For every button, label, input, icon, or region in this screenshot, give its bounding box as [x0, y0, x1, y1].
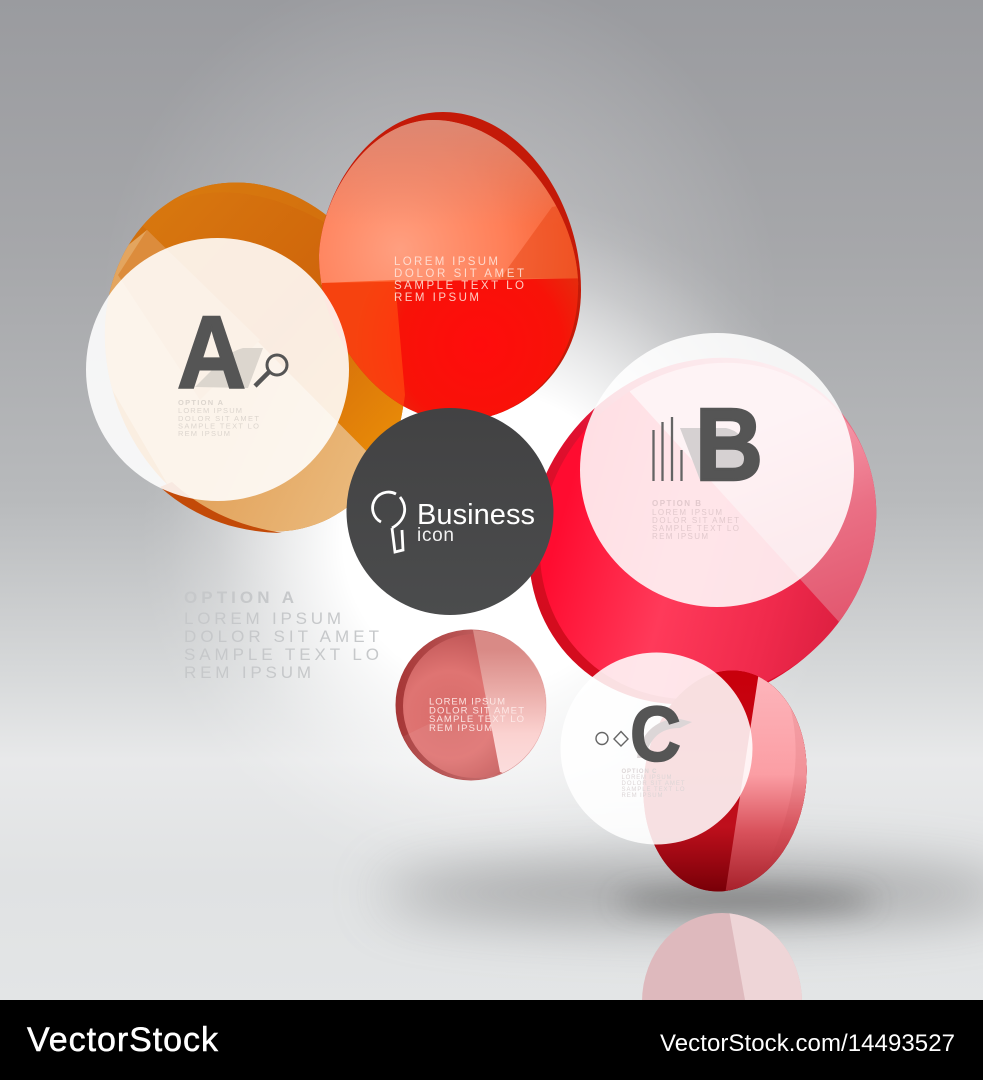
- text: red shape lorem ipsum: DOLOR SIT AMET: [394, 268, 524, 280]
- text: icon: icon: [417, 525, 454, 546]
- panel: red shape with text: [319, 112, 581, 416]
- text: option A large faded: DOLOR SIT AMET: [184, 627, 379, 646]
- text: option B small: REM IPSUM: [652, 532, 708, 541]
- text: option B small: DOLOR SIT AMET: [652, 516, 739, 525]
- text: option A large faded: LOREM IPSUM: [184, 609, 341, 628]
- text: small circle lorem ipsum: [429, 696, 524, 734]
- text: small circle lorem ipsum: DOLOR SIT AMET: [429, 706, 524, 716]
- heading: letter B: B: [695, 387, 763, 502]
- text: option C small: OPTION C: [622, 769, 657, 775]
- text: option C small: [622, 769, 685, 799]
- text: option B small: OPTION B: [652, 499, 701, 508]
- icon: letter B shadow: [680, 428, 747, 480]
- icon: letter A shadow: [195, 348, 263, 388]
- text: option A small: OPTION A: [178, 398, 224, 407]
- panel: dark circle: [346, 408, 554, 615]
- text: option B small: LOREM IPSUM: [652, 508, 722, 517]
- bottom crescent: [160, 482, 282, 533]
- text: option B small: [652, 499, 739, 541]
- text: option A large faded: OPTION A: [184, 588, 294, 607]
- text: option A small: LOREM IPSUM: [178, 406, 242, 415]
- text: option A large faded: SAMPLE TEXT LO: [184, 645, 379, 664]
- text: red shape lorem ipsum: REM IPSUM: [394, 292, 479, 304]
- panel: small red circle: [396, 630, 546, 780]
- text: option C small: DOLOR SIT AMET: [622, 781, 685, 787]
- text: option A small: DOLOR SIT AMET: [178, 414, 259, 423]
- icon: magnifier: [255, 355, 287, 386]
- footer bar: [0, 1000, 983, 1080]
- panel: white circle A: [86, 238, 349, 501]
- icon: circle and diamond: [596, 732, 628, 746]
- text: option A small: SAMPLE TEXT LO: [178, 422, 259, 430]
- panel: pink shape: [530, 358, 876, 704]
- heading: letter A: A: [177, 294, 246, 410]
- reflection of red shape: [642, 913, 802, 1000]
- panel: orange shape: [105, 182, 404, 533]
- text: option A small: [178, 398, 259, 438]
- text: red shape lorem ipsum: [394, 256, 524, 304]
- text: option A large faded: [184, 588, 379, 682]
- panel: red egg shape: [643, 670, 807, 892]
- text: option C small: REM IPSUM: [622, 793, 662, 799]
- icon: light bulb: [373, 492, 405, 552]
- text: VectorStock logo: VectorStock: [27, 1021, 219, 1059]
- icon: letter C shadow: [637, 719, 692, 758]
- text: option C small: SAMPLE TEXT LO: [622, 787, 685, 793]
- panel: white circle C: [560, 652, 752, 844]
- text: small circle lorem ipsum: LOREM IPSUM: [429, 696, 505, 708]
- text: red shape lorem ipsum: SAMPLE TEXT LO: [394, 280, 524, 292]
- floor shadow: [380, 863, 983, 923]
- text: option A small: REM IPSUM: [178, 429, 230, 438]
- text: small circle lorem ipsum: SAMPLE TEXT LO: [429, 714, 524, 725]
- text: option A large faded: REM IPSUM: [184, 663, 311, 682]
- dark outer shape: [319, 112, 581, 421]
- text: image URL: VectorStock.com/14493527: [660, 1030, 955, 1057]
- text: small circle lorem ipsum: REM IPSUM: [429, 723, 492, 734]
- text: Business: Business: [417, 499, 535, 531]
- text: option B small: SAMPLE TEXT LO: [652, 524, 739, 533]
- panel: white circle B: [580, 333, 854, 607]
- icon: bar lines: [654, 417, 682, 481]
- heading: letter C: C: [630, 690, 681, 778]
- text: red shape lorem ipsum: LOREM IPSUM: [394, 256, 498, 268]
- text: option C small: LOREM IPSUM: [622, 775, 672, 781]
